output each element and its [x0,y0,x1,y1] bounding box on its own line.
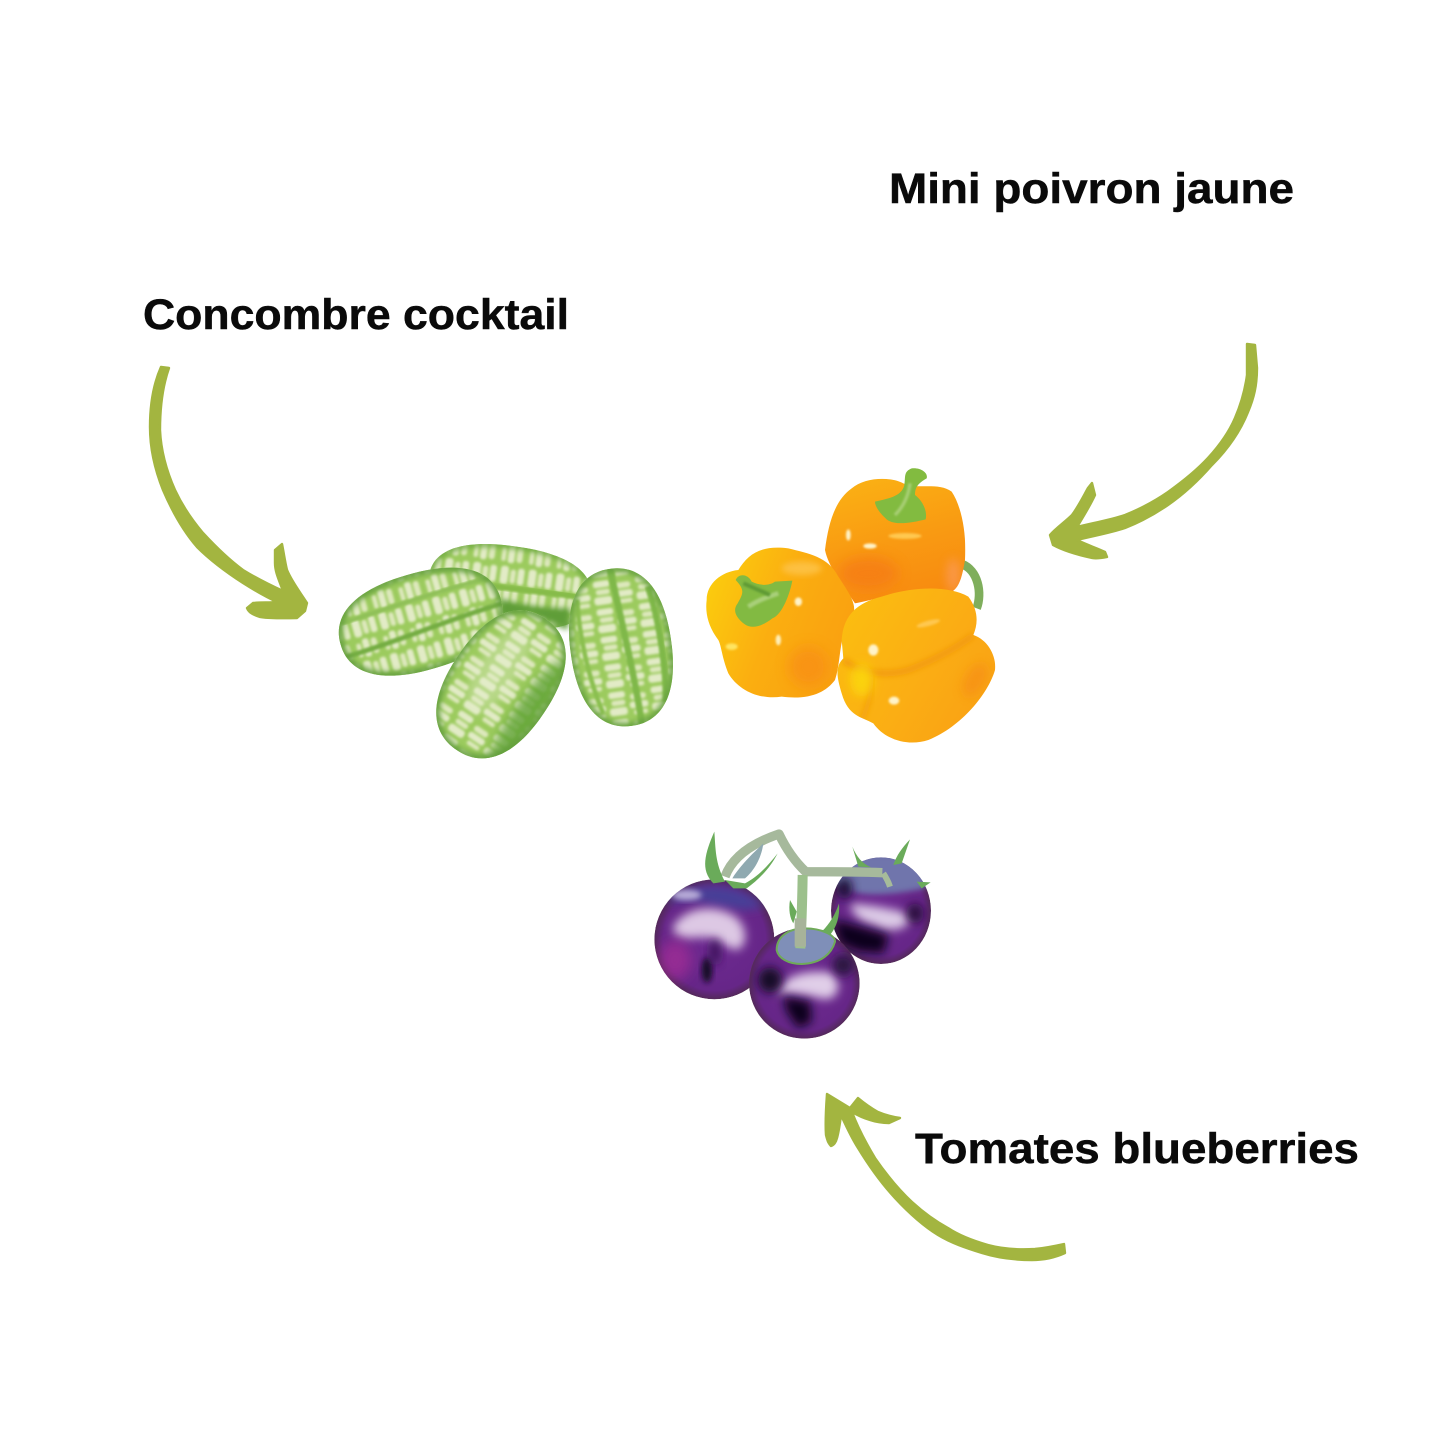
illustration: blueberry tomatoes [654,832,931,1039]
pepper left [703,545,860,702]
cucumber front [436,610,566,758]
label: Mini poivron jaune: Mini poivron jaune [889,165,1294,213]
arrow: from Mini poivron jaune to peppers [1050,344,1257,558]
cucumber right [568,568,673,726]
pepper top stem [875,468,927,523]
sepals [705,832,931,935]
pepper left stem [735,575,792,627]
calyx bottom [777,928,835,964]
label: Tomates blueberries: Tomates blueberries [915,1125,1359,1173]
stalk behind lower pepper [962,564,979,608]
pepper lower right [835,583,998,743]
pepper top [822,477,968,607]
tomato right [831,853,931,964]
arrow: from Concombre cocktail to cucumbers [150,367,307,618]
label: Concombre cocktail: Concombre cocktail [143,291,569,339]
illustration: cocktail cucumbers [338,544,673,758]
arrow: from Tomates blueberries to tomatoes [826,1094,1065,1260]
tomato bottom [749,928,860,1039]
illustration: mini yellow peppers [703,468,998,743]
cucumber back [430,544,588,628]
stems [725,834,890,948]
cucumber left [338,568,503,676]
tomato left [654,879,774,999]
shadow between cucumbers [500,598,571,630]
